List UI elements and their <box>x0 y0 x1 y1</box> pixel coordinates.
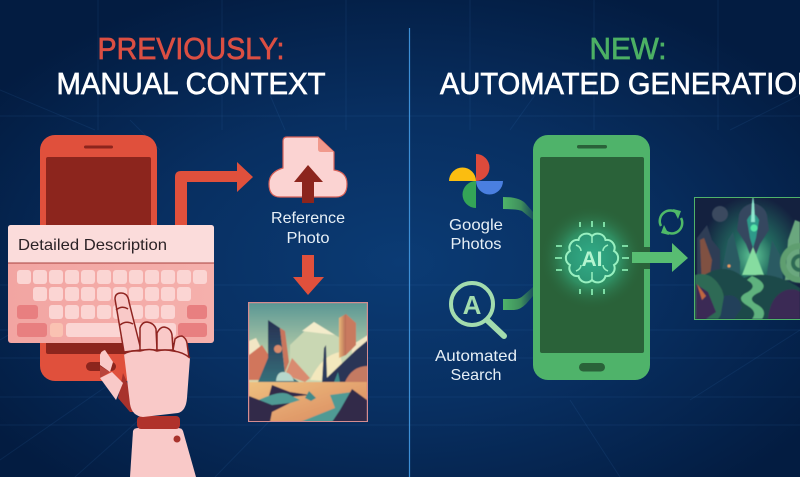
icon: google photos pinwheel <box>449 154 503 208</box>
text field: detailed description <box>8 225 214 263</box>
title: previously: PREVIOUSLY: <box>98 31 284 66</box>
red down arrow <box>293 255 324 295</box>
image: generated fantasy landscape <box>694 194 800 320</box>
icon: AI brain <box>540 206 644 310</box>
label: google photos: Photos <box>450 236 502 253</box>
keys <box>17 270 207 337</box>
label: reference photo <box>271 210 345 247</box>
green arrow <box>632 243 688 272</box>
title: new: NEW: <box>590 31 666 66</box>
keyboard panel <box>8 225 214 343</box>
title: previously: MANUAL CONTEXT <box>56 66 326 101</box>
thumb <box>100 350 113 372</box>
title: previously <box>56 31 326 101</box>
icon: AI brain: AI <box>582 248 602 271</box>
green phone <box>533 135 650 380</box>
label: reference photo: Photo <box>286 230 330 247</box>
wrist band <box>137 416 180 429</box>
connector: photos to phone <box>503 197 533 220</box>
icon: automated search magnifier: A <box>463 290 482 320</box>
label: google photos: Google <box>449 217 503 234</box>
red elbow arrow <box>175 162 253 226</box>
icon: refresh <box>660 209 682 235</box>
web of thumb <box>118 373 140 412</box>
robot hand <box>100 293 196 477</box>
label: automated search: Automated <box>435 348 517 365</box>
text field: detailed description: Detailed Description <box>18 237 167 254</box>
palm <box>124 350 190 417</box>
icon: automated search magnifier <box>451 283 504 336</box>
image: geometric landscape <box>248 302 368 422</box>
label: reference photo: Reference <box>271 210 345 227</box>
title: new <box>440 31 800 101</box>
label: automated search: Search <box>450 367 502 384</box>
fingers <box>115 293 141 352</box>
red phone <box>40 135 157 381</box>
forearm <box>130 428 196 477</box>
connector: search to phone <box>503 287 533 310</box>
icon: cloud upload reference photo <box>269 137 347 203</box>
center divider <box>408 28 410 477</box>
label: google photos <box>449 217 503 253</box>
label: automated search <box>435 348 517 384</box>
